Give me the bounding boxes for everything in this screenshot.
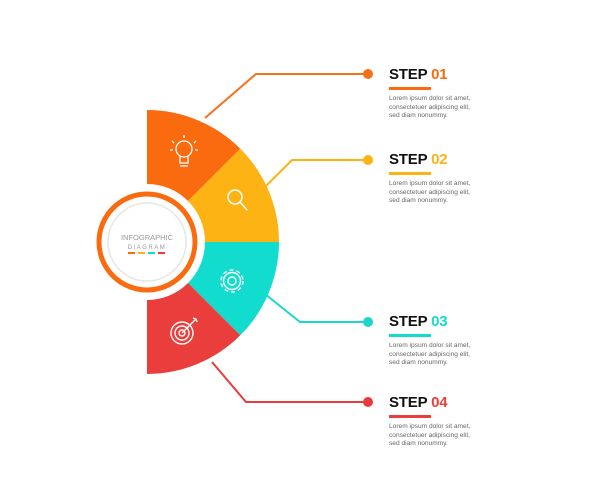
step 01: Lorem ipsum dolor sit amet, xyxy=(389,95,470,102)
icon: target xyxy=(171,318,197,344)
step 02: STEP 02 xyxy=(389,151,447,168)
segment: red xyxy=(147,242,240,374)
step 04: sed diam nonummy. xyxy=(389,440,448,447)
step 03: sed diam nonummy. xyxy=(389,359,448,366)
step 04: consectetuer adipiscing elit, xyxy=(389,432,470,439)
step 02: sed diam nonummy. xyxy=(389,197,448,204)
icon: gear xyxy=(221,270,243,292)
center circle: DIAGRAM xyxy=(128,245,166,251)
step 01: sed diam nonummy. xyxy=(389,112,448,119)
step 01: consectetuer adipiscing elit, xyxy=(389,104,470,111)
center circle xyxy=(99,194,195,290)
connector lines xyxy=(205,69,373,407)
step 03: consectetuer adipiscing elit, xyxy=(389,351,470,358)
icon: bulb xyxy=(170,135,198,166)
step 02: Lorem ipsum dolor sit amet, xyxy=(389,180,470,187)
step 02: consectetuer adipiscing elit, xyxy=(389,189,470,196)
segment: orange xyxy=(147,110,240,242)
step 03: Lorem ipsum dolor sit amet, xyxy=(389,342,470,349)
step 01 xyxy=(389,66,470,119)
center circle: INFOGRAPHIC xyxy=(121,233,174,242)
segment: teal xyxy=(147,242,279,335)
segment: yellow xyxy=(147,149,279,242)
step 04 xyxy=(389,394,470,447)
step 01: STEP 01 xyxy=(389,66,447,83)
step 03 xyxy=(389,313,470,366)
step 04: Lorem ipsum dolor sit amet, xyxy=(389,423,470,430)
icon: magnifier xyxy=(228,190,247,210)
step 02 xyxy=(389,151,470,204)
step 04: STEP 04 xyxy=(389,394,447,411)
step 03: STEP 03 xyxy=(389,313,447,330)
